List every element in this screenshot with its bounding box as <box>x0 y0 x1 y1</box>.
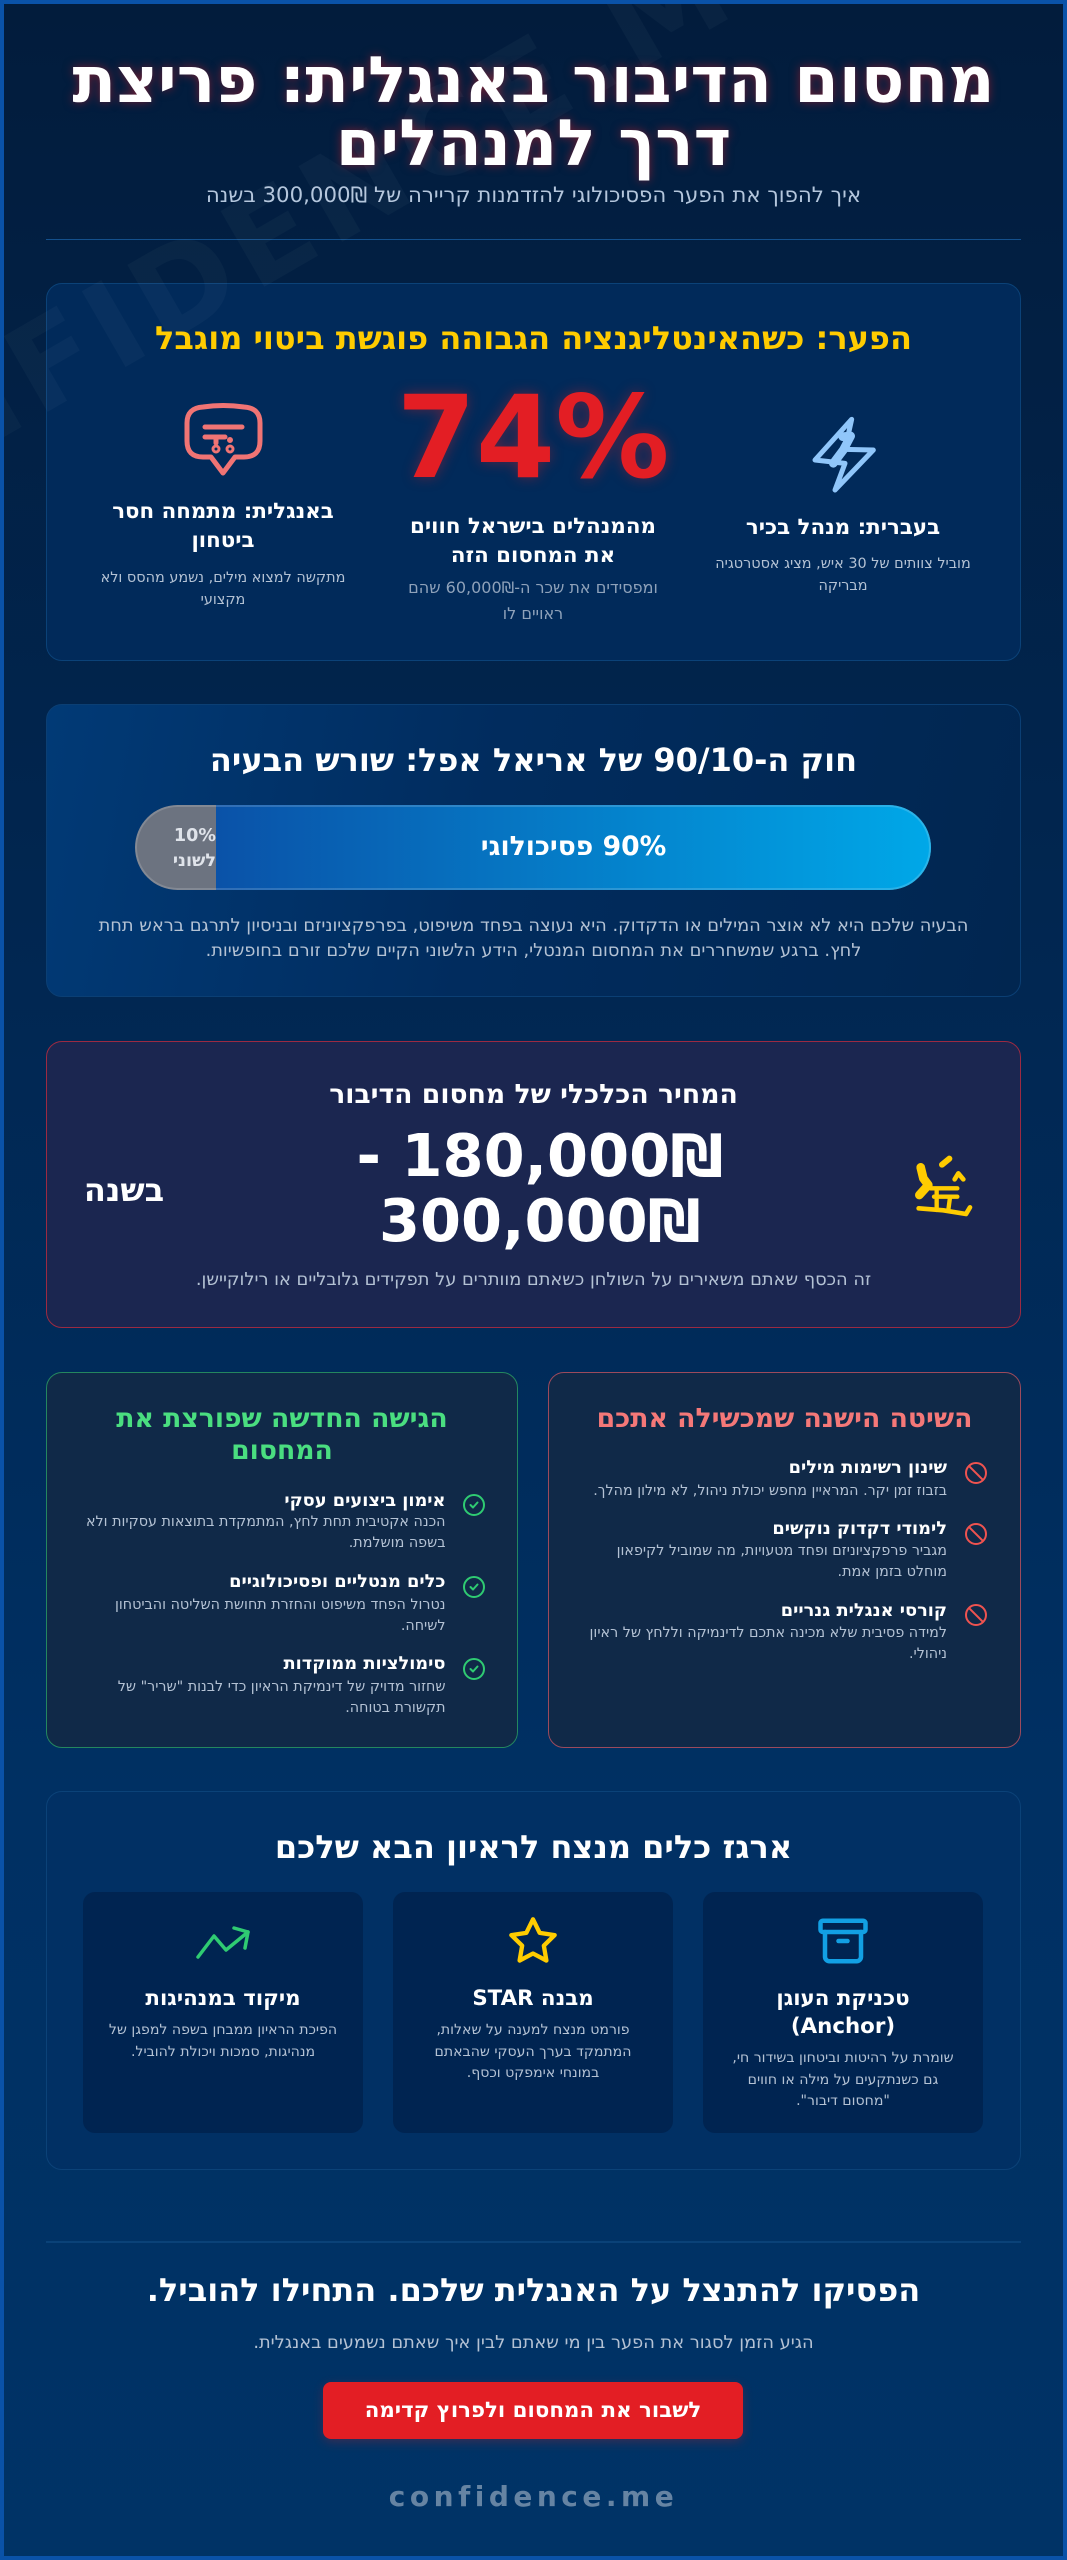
icon: shekel coins <box>915 1156 972 1216</box>
item text: תקשורת בטוחה. <box>345 1700 446 1716</box>
item text: בזבוז זמן יקר. המראיין מחפש יכולת ניהול, לא מילון מהלך. <box>593 1482 947 1498</box>
statistic label: את המחסום הזה <box>451 543 615 568</box>
panel: toolkit <box>46 1791 1021 2170</box>
bar segment: 90 percent psychological: 90% פסיכולוגי <box>481 831 666 862</box>
heading: call to action: הפסיקו להתנצל על האנגלית שלכם. התחילו להוביל. <box>147 2271 920 2309</box>
icon: prohibited <box>965 1462 987 1484</box>
label: English struggle: באנגלית: מתמחה חסר <box>112 499 334 524</box>
card text <box>393 2020 673 2085</box>
item title: קורסי אנגלית גנריים <box>781 1600 947 1620</box>
heading: toolkit: ארגז כלים מנצח לראיון הבא שלכם <box>275 1828 792 1866</box>
item title: כלים מנטליים ופסיכולוגיים <box>229 1571 446 1592</box>
heading: economic cost: המחיר הכלכלי של מחסום הדיבור <box>329 1079 738 1110</box>
card text: גם כשנתקעים על מילה או חווים <box>748 2072 938 2088</box>
icon: archive box <box>818 1918 868 1964</box>
card title: (Anchor) <box>791 2014 895 2039</box>
card title: טכניקת העוגן <box>776 1986 910 2011</box>
statistic note <box>408 578 658 623</box>
panel: the old method <box>548 1372 1021 1748</box>
icon: check circle <box>463 1494 485 1516</box>
item title: סימולציות ממוקדות <box>284 1653 446 1674</box>
item text: ניהולי. <box>909 1646 947 1662</box>
card text: פורמט מנצח למענה על שאלות, <box>436 2022 630 2038</box>
item text <box>118 1678 446 1716</box>
item text <box>617 1543 947 1580</box>
icon: trending up <box>190 1922 250 1962</box>
description: Hebrew executive: מבריקה <box>818 578 868 594</box>
button <box>323 2382 743 2439</box>
heading: the gap: הפער: כשהאינטליגנציה הגבוהה פוגשת ביטוי מוגבל <box>155 319 912 357</box>
body text: the problem: הבעיה שלכם היא לא אוצר המילים או הדקדוק. היא נעוצה בפחד משיפוט, בפרפקציוניזם ובניסיון לתרגם בראש תחת <box>99 914 968 936</box>
call to action text: הגיע הזמן לסגור את הפער בין מי שאתם לבין איך שאתם נשמעים באנגלית. <box>253 2332 814 2353</box>
description: English struggle: מקצועי <box>201 592 245 608</box>
column: in English <box>101 403 345 608</box>
body text: the problem: לחץ. ברגע שמשחררים את המחסום המנטלי, הידע הלשוני הקיים שלכם זורם בחופשיות. <box>206 940 861 960</box>
item title: אימון ביצועים עסקי <box>284 1490 446 1511</box>
heading: new approach: המחסום <box>231 1435 333 1466</box>
statistic label: מהמנהלים בישראל חווים <box>410 514 656 539</box>
heading: 90/10 rule: חוק ה-90/10 של אריאל אפל: שורש הבעיה <box>210 741 857 779</box>
card text <box>83 2020 363 2063</box>
item text <box>590 1624 947 1662</box>
progress bar <box>135 805 931 890</box>
description: Hebrew executive: מוביל צוותים של 30 איש, מציג אסטרטגיה <box>715 556 971 572</box>
description: English struggle <box>101 570 345 608</box>
card title: מבנה STAR <box>472 1986 594 2011</box>
title <box>68 44 996 186</box>
card text <box>703 2048 983 2113</box>
card: STAR structure <box>393 1892 673 2133</box>
call to action <box>46 2270 1021 2440</box>
bar segment: 10 percent linguistic: 10% <box>174 826 216 846</box>
item text: למידה פסיבית שלא מכינה אתכם לדינמיקה וללחץ של ראיון <box>590 1624 947 1640</box>
panel: economic cost <box>46 1041 1021 1328</box>
item text: הכנה אקטיבית תחת לחץ, המתמקדת בתוצאות עסקיות ולא <box>86 1514 446 1530</box>
label: Hebrew executive: בעברית: מנהל בכיר <box>746 515 940 540</box>
item text <box>115 1596 446 1634</box>
item: simulations <box>118 1653 485 1716</box>
statistic note: ראויים לו <box>503 604 563 623</box>
card: leadership focus <box>83 1892 363 2133</box>
item: grammar <box>617 1518 987 1580</box>
card: anchor technique <box>703 1892 983 2133</box>
amount range: 180,000₪ - <box>356 1121 724 1190</box>
item text <box>86 1514 446 1551</box>
bar segment: 10 percent linguistic: לשוני <box>173 851 216 871</box>
card title: מיקוד במנהיגות <box>145 1986 301 2011</box>
card text: המתמקד בערך העסקי שהבאתם <box>435 2044 631 2060</box>
icon: check circle <box>463 1576 485 1598</box>
description: Hebrew executive <box>715 556 971 594</box>
column: in Hebrew <box>715 416 971 594</box>
bar segment: 10 percent linguistic <box>173 826 216 871</box>
item: performance training <box>86 1490 485 1551</box>
item text: בשפה מושלמת. <box>349 1535 446 1551</box>
heading: new approach <box>116 1403 448 1466</box>
icon: speech bubble <box>184 403 262 476</box>
statistic note: ומפסידים את שכר ה-60,000₪ שהם <box>408 578 658 597</box>
title: מחסום הדיבור באנגלית: פריצת <box>72 44 995 118</box>
item text: מגביר פרפקציוניזם ופחד מטעויות, מה שמוביל לקיפאון <box>617 1543 947 1559</box>
item title: שינון רשימות מילים <box>789 1457 947 1478</box>
icon: star <box>507 1915 559 1967</box>
panel: the new approach <box>46 1372 518 1748</box>
body text: the problem <box>98 914 968 960</box>
icon: prohibited <box>965 1523 987 1545</box>
panel: 90/10 rule <box>46 704 1021 997</box>
card title <box>703 1985 983 2041</box>
card text: במונחי אימפקט וכסף. <box>467 2065 599 2081</box>
heading: old method: השיטה הישנה שמכשילה אתכם <box>597 1403 972 1434</box>
subtitle: איך להפוך את הפער הפסיכולוגי להזדמנות קריירה של 300,000₪ בשנה <box>206 183 861 208</box>
footer brand: confidence.me <box>389 2480 678 2513</box>
big number: 74% <box>397 371 669 504</box>
note: money left on the table: זה הכסף שאתם משאירים על השולחן כשאתם מוותרים על תפקידים גלובליים או רילוקיישן. <box>196 1269 871 1290</box>
item: mental tools <box>115 1571 485 1634</box>
bar segment: 90 percent psychological <box>216 805 931 890</box>
icon: prohibited <box>965 1604 987 1626</box>
amount range: 300,000₪ <box>379 1186 701 1255</box>
description: English struggle: מתקשה למצוא מילים, נשמע מהסס ולא <box>101 570 345 586</box>
icon: lightning bolt <box>812 416 876 492</box>
item text: מוחלט בזמן אמת. <box>838 1564 947 1580</box>
item text: נטרול הפחד משיפוט והחזרת תחושת השליטה והביטחון <box>115 1596 446 1612</box>
label: English struggle <box>112 499 334 553</box>
card text: מנהיגות, סמכות ויכולת להוביל. <box>131 2044 315 2060</box>
amount range <box>356 1121 724 1255</box>
item text: לשיחה. <box>401 1618 446 1634</box>
card text: שומרת על רהיטות וביטחון בשידור חי, <box>732 2050 954 2066</box>
item text: שחזור מדויק של דינמיקת הראיון כדי לבנות "שריר" של <box>118 1678 446 1694</box>
column: 74 percent statistic <box>397 371 674 623</box>
card text: הפיכת הראיון ממבחן בשפה למפגן של <box>109 2022 337 2038</box>
item: word lists <box>593 1457 987 1498</box>
label: English struggle: ביטחון <box>191 528 255 553</box>
heading: new approach: הגישה החדשה שפורצת את <box>116 1403 448 1434</box>
icon: check circle <box>463 1658 485 1680</box>
item: generic courses <box>590 1600 987 1662</box>
label: per year: בשנה <box>84 1171 164 1209</box>
button: לשבור את המחסום ולפרוץ קדימה <box>365 2398 701 2423</box>
panel: the gap <box>46 283 1021 661</box>
item title: לימודי דקדוק נוקשים <box>772 1518 947 1539</box>
title: דרך למנהלים <box>336 107 731 181</box>
statistic label <box>410 514 656 568</box>
card text: "מחסום דיבור". <box>796 2093 890 2109</box>
